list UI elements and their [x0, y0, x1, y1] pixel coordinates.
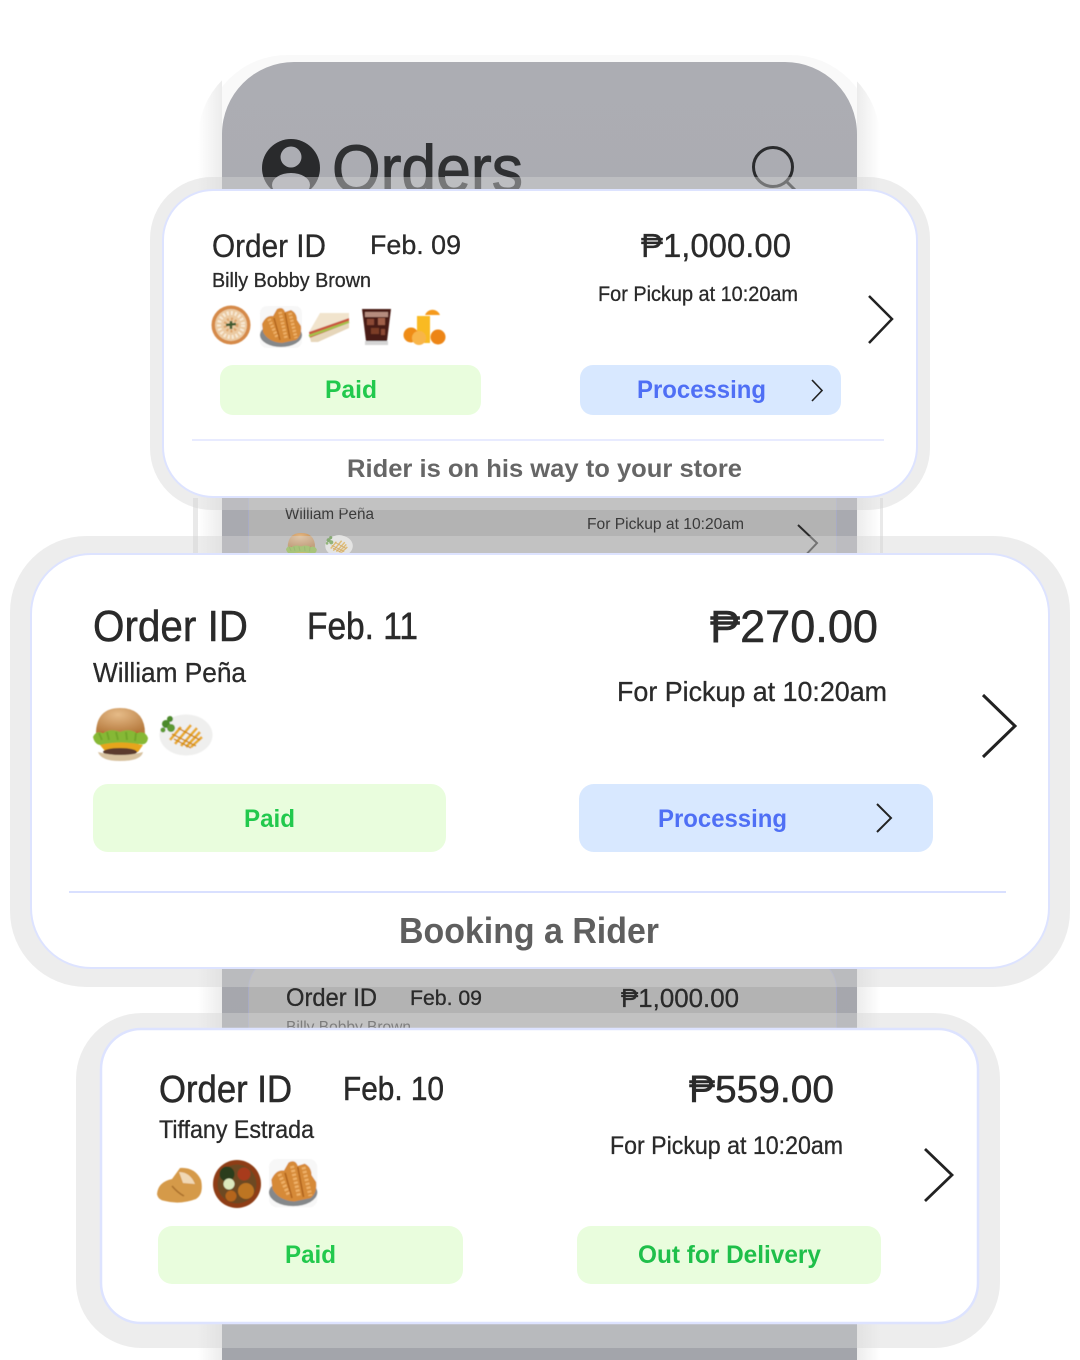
order id: Order ID [212, 228, 326, 264]
food: sandwich [309, 313, 349, 342]
screen title: Orders: Orders [332, 132, 523, 207]
order id: Order ID [159, 1069, 292, 1111]
processing badge [580, 365, 841, 415]
search icon [754, 148, 799, 194]
arrow [869, 296, 892, 343]
order card: Billy Bobby Brown [150, 177, 930, 510]
paid badge [93, 784, 446, 852]
background burger thumbnail [286, 533, 317, 563]
arrow [925, 1149, 952, 1201]
pickup time: For Pickup at 10:20am [610, 1132, 843, 1160]
date: Feb. 10 [343, 1070, 444, 1107]
background order heading: Order ID [286, 984, 377, 1012]
food: chicken wings [269, 1159, 317, 1207]
price: ₱1,000.00 [641, 227, 791, 264]
list card under top card [248, 440, 836, 960]
background customer name: Billy Bobby Brown [286, 1019, 411, 1036]
background order text: William Peña: William Peña [285, 506, 374, 523]
background order date: Feb. 09 [410, 987, 482, 1010]
food: orange juice [404, 310, 446, 345]
paid badge: Paid [244, 805, 295, 833]
phone mockup behind cards [193, 55, 883, 1360]
date: Feb. 11 [307, 606, 418, 648]
processing badge [579, 784, 933, 852]
profile avatar icon [262, 139, 320, 197]
customer name: William Peña [93, 657, 246, 688]
background chevron [798, 525, 817, 560]
order card: William Peña [10, 536, 1070, 987]
order card: Tiffany Estrada [76, 1013, 1000, 1348]
pickup time: For Pickup at 10:20am [617, 676, 887, 707]
price: ₱559.00 [689, 1069, 834, 1111]
food: rice bowl [213, 1160, 261, 1208]
food: nuggets [157, 1168, 202, 1203]
arrow [983, 695, 1015, 757]
status message: Booking a Rider [399, 910, 659, 951]
order id: Order ID [93, 602, 248, 651]
paid badge: Paid [285, 1241, 336, 1269]
paid badge [158, 1226, 463, 1284]
date: Feb. 09 [370, 230, 461, 260]
paid badge: Paid [325, 376, 377, 404]
processing badge: Processing [658, 805, 787, 833]
food: chicken wings [260, 306, 302, 348]
list card under middle card [248, 955, 836, 1300]
price: ₱270.00 [710, 601, 878, 652]
out for delivery badge [577, 1226, 881, 1284]
processing badge: Processing [637, 376, 766, 404]
customer name: Tiffany Estrada [159, 1116, 314, 1144]
food: cola glass [362, 309, 391, 345]
background order price: ₱1,000.00 [621, 983, 739, 1013]
status message: Rider is on his way to your store [347, 455, 742, 483]
out for delivery badge: Out for Delivery [638, 1241, 821, 1269]
customer name: Billy Bobby Brown [212, 269, 371, 292]
food: burger [93, 708, 148, 761]
background pickup text: For Pickup at 10:20am [587, 516, 744, 533]
paid badge [220, 365, 481, 415]
food: fries [160, 714, 212, 756]
pickup time: For Pickup at 10:20am [598, 283, 798, 306]
food: pizza [212, 306, 250, 344]
background fries thumbnail [325, 535, 353, 557]
